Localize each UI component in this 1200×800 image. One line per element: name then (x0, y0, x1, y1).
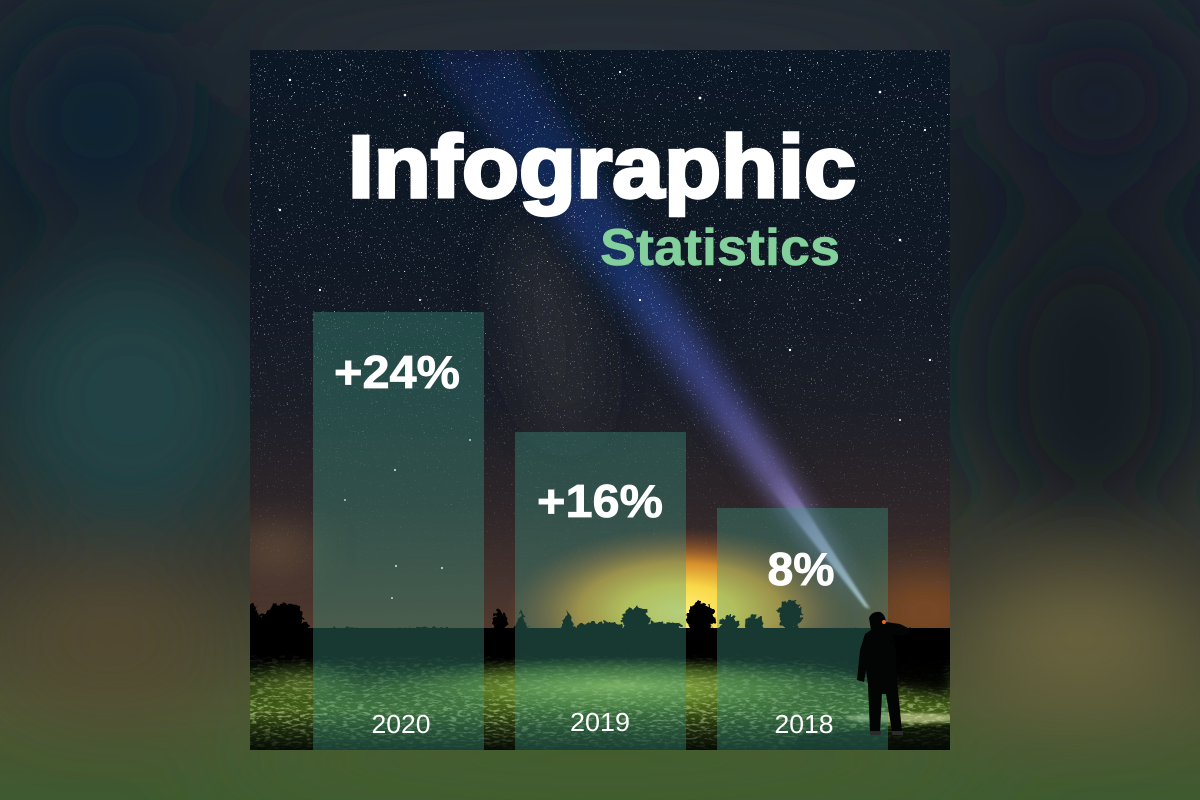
poster photo: night sky with flashlight beam (235, 50, 985, 750)
value: +24%: +24% (334, 346, 460, 398)
lit grass (250, 656, 950, 750)
value: +16%: +16% (537, 475, 663, 527)
sky (250, 50, 950, 640)
milky way haze (250, 232, 950, 628)
bar: 2018 (717, 508, 888, 750)
flashlight beam (420, 50, 870, 612)
horizon glow (514, 530, 842, 628)
person silhouette with headlamp (857, 612, 912, 735)
bar: 2019 (515, 432, 686, 750)
bright stars (279, 69, 931, 599)
year: 2018: 2018 (774, 709, 834, 739)
subtitle: Statistics (600, 219, 840, 277)
ground (250, 628, 950, 750)
year: 2020: 2020 (372, 709, 430, 739)
bar: 2020 (313, 312, 484, 750)
star field (250, 50, 950, 610)
tree line silhouette (240, 600, 960, 656)
year: 2019: 2019 (570, 707, 630, 737)
value: 8%: 8% (768, 543, 834, 595)
title: Infographic (348, 117, 856, 216)
